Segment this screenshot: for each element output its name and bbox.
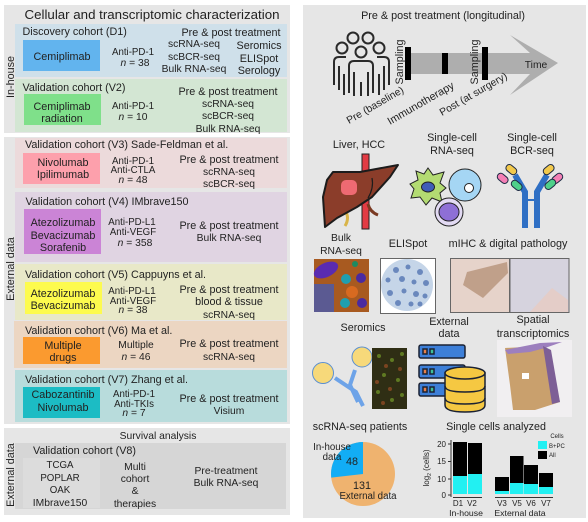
bar labels: V3 bbox=[497, 499, 507, 508]
validation cohort V8 bbox=[33, 445, 259, 510]
validation cohort V3: Ipilimumab bbox=[37, 169, 89, 181]
label: in-house: In-house bbox=[5, 56, 17, 98]
label: external: External bbox=[429, 316, 469, 328]
validation cohort V2: radiation bbox=[41, 113, 83, 125]
validation cohort V3: Validation cohort (V3) Sade-Feldman et al. bbox=[25, 139, 228, 151]
discovery cohort D1: scRNA-seq bbox=[168, 39, 220, 50]
discovery cohort D1: Bulk RNA-seq bbox=[162, 64, 227, 75]
validation cohort V4 bbox=[15, 192, 287, 262]
validation cohort V6: Multiple bbox=[118, 340, 154, 351]
image: mIHC left bbox=[450, 258, 510, 312]
label: data: data bbox=[438, 328, 460, 340]
validation cohort V2: Validation cohort (V2) bbox=[22, 82, 126, 94]
label: post at surgery: Post (at surgery) bbox=[438, 71, 509, 119]
icon: seromics antibody bbox=[312, 347, 372, 406]
validation cohort V2: Pre & post treatment bbox=[178, 86, 278, 98]
validation cohort V3: Anti-CTLA bbox=[111, 165, 156, 176]
validation cohort V6: Pre & post treatment bbox=[179, 338, 279, 350]
icon: patients group bbox=[334, 32, 389, 96]
validation cohort V4: Bevacizumab bbox=[31, 230, 95, 242]
validation cohort V4: Atezolizumab bbox=[31, 217, 95, 229]
validation cohort V7: Nivolumab bbox=[37, 402, 89, 414]
validation cohort V5: Anti-PD-L1 bbox=[108, 286, 156, 297]
image: bulk RNA-seq collage bbox=[311, 258, 369, 312]
bar labels: V2 bbox=[467, 499, 477, 508]
label: transcriptomics: transcriptomics bbox=[497, 328, 570, 340]
validation cohort V3: Anti-PD-1 bbox=[112, 156, 154, 167]
validation cohort V8: IMbrave150 bbox=[33, 498, 87, 509]
discovery cohort D1: Serology bbox=[238, 65, 281, 77]
validation cohort V7: Cabozantinib bbox=[31, 389, 95, 401]
pie chart: patients: 131 bbox=[353, 480, 371, 492]
image: ELISpot well bbox=[380, 258, 436, 314]
bar labels: V6 bbox=[526, 499, 536, 508]
validation cohort V4: Bulk RNA-seq bbox=[197, 233, 262, 244]
validation cohort V7: Pre & post treatment bbox=[179, 393, 279, 405]
marker: immunotherapy bbox=[442, 53, 448, 74]
validation cohort V2: Bulk RNA-seq bbox=[196, 124, 261, 135]
title: Cellular and transcriptomic characterization bbox=[25, 7, 279, 22]
validation cohort V5 bbox=[15, 264, 287, 321]
validation cohort V3: scRNA-seq bbox=[203, 167, 255, 178]
legend: All bbox=[549, 453, 556, 459]
panel: methods and sampling bbox=[303, 5, 586, 518]
validation cohort V7: Visium bbox=[214, 406, 244, 417]
validation cohort V4: Pre & post treatment bbox=[179, 220, 279, 232]
validation cohort V6: drugs bbox=[49, 352, 77, 364]
discovery cohort D1: ELISpot bbox=[240, 53, 278, 65]
validation cohort V7: Anti-TKIs bbox=[114, 399, 154, 410]
validation cohort V5: blood & tissue bbox=[195, 296, 263, 308]
validation cohort V2: Cemiplimab bbox=[34, 101, 90, 113]
validation cohort V6 bbox=[14, 321, 287, 368]
discovery cohort D1: scBCR-seq bbox=[168, 52, 220, 63]
validation cohort V3 bbox=[15, 138, 287, 190]
label: ELISpot: ELISpot bbox=[389, 238, 427, 250]
label: RNA-seq: RNA-seq bbox=[430, 145, 474, 157]
group labels bbox=[449, 508, 546, 518]
validation cohort V4: Validation cohort (V4) IMbrave150 bbox=[26, 196, 189, 208]
icon: liver with tumour bbox=[323, 154, 398, 229]
bar labels: V7 bbox=[541, 499, 551, 508]
bar labels: V5 bbox=[512, 499, 522, 508]
label: liver: Liver, HCC bbox=[333, 139, 385, 151]
validation cohort V5: Pre & post treatment bbox=[179, 284, 279, 296]
label: single-cell RNA-seq: Single-cell bbox=[427, 132, 477, 144]
validation cohort V8: therapies bbox=[114, 499, 156, 510]
discovery cohort D1: Discovery cohort (D1) bbox=[22, 26, 127, 38]
axis tick labels: 0 bbox=[442, 491, 447, 500]
validation cohort V7: Anti-PD-1 bbox=[113, 389, 155, 400]
marker: post sampling bbox=[482, 47, 488, 80]
validation cohort V5: Atezolizumab bbox=[31, 288, 95, 300]
validation cohort V8: Bulk RNA-seq bbox=[194, 478, 259, 489]
pie chart: patients: data bbox=[323, 452, 342, 463]
icon: servers and database bbox=[419, 345, 485, 412]
validation cohort V7: Validation cohort (V7) Zhang et al. bbox=[25, 374, 188, 386]
validation cohort V6: scRNA-seq bbox=[203, 352, 255, 363]
validation cohort V3: scBCR-seq bbox=[203, 179, 255, 190]
validation cohort V4: Anti-VEGF bbox=[110, 227, 156, 238]
validation cohort V3: n = 48 bbox=[119, 175, 148, 186]
validation cohort V2: Anti-PD-1 bbox=[112, 101, 154, 112]
y axis bbox=[448, 440, 553, 498]
validation cohort V5: scRNA-seq bbox=[203, 310, 255, 321]
label: BCR-seq: BCR-seq bbox=[510, 145, 554, 157]
validation cohort V8: Multi bbox=[124, 462, 146, 473]
bars bbox=[453, 442, 553, 494]
axis tick labels: 20 bbox=[437, 440, 447, 449]
label: external data: External data bbox=[5, 237, 17, 301]
y axis title: 2 bbox=[427, 473, 433, 476]
validation cohort V5: Anti-VEGF bbox=[110, 296, 156, 307]
validation cohort V4: n = 358 bbox=[118, 238, 153, 249]
label: RNA-seq bulk: RNA-seq bbox=[320, 246, 362, 257]
panel: external data cohorts bbox=[4, 137, 290, 424]
label: bulk: Bulk bbox=[331, 233, 352, 244]
y axis title: log bbox=[422, 476, 431, 487]
group labels: In-house bbox=[449, 508, 483, 518]
validation cohort V8: Pre-treatment bbox=[195, 466, 258, 477]
panel: survival analysis bbox=[4, 428, 290, 515]
icon: cells bbox=[410, 168, 481, 226]
discovery cohort D1: Cemiplimab bbox=[34, 51, 90, 63]
image: protein array bbox=[372, 348, 407, 409]
validation cohort V8: POPLAR bbox=[40, 473, 80, 484]
arrow: time bbox=[410, 35, 558, 95]
validation cohort V3: Pre & post treatment bbox=[179, 154, 279, 166]
validation cohort V2: scRNA-seq bbox=[202, 99, 254, 110]
icon: antibody bbox=[496, 163, 564, 228]
label: sampling post: Sampling bbox=[469, 39, 481, 85]
label: immunotherapy: Immunotherapy bbox=[386, 79, 457, 128]
label: mIHC and digital pathology: mIHC & digital pathology bbox=[449, 238, 568, 250]
marker: pre sampling bbox=[405, 47, 411, 80]
axis tick labels bbox=[437, 440, 447, 500]
discovery cohort D1: Seromics bbox=[236, 40, 282, 52]
pie chart: patients: 48 bbox=[346, 456, 358, 468]
axis tick labels: 10 bbox=[437, 475, 447, 484]
validation cohort V8: OAK bbox=[50, 485, 71, 496]
legend: B+PC bbox=[549, 444, 566, 450]
validation cohort V6: n = 46 bbox=[122, 352, 151, 363]
validation cohort V6: Validation cohort (V6) Ma et al. bbox=[25, 325, 172, 337]
validation cohort V4: Sorafenib bbox=[40, 242, 86, 254]
bar labels: D1 bbox=[453, 499, 464, 508]
label: seromics: Seromics bbox=[340, 322, 386, 334]
validation cohort V7 bbox=[15, 370, 287, 422]
heading: survival analysis: Survival analysis bbox=[120, 431, 196, 442]
label: single-cell BCR-seq: Single-cell bbox=[507, 132, 557, 144]
validation cohort V5: n = 38 bbox=[119, 305, 148, 316]
group labels: External data bbox=[494, 508, 546, 518]
discovery cohort D1: Anti-PD-1 bbox=[112, 47, 154, 58]
pie chart: patients: In-house bbox=[313, 442, 351, 453]
label: external data survival: External data bbox=[5, 443, 17, 507]
discovery cohort D1: n = 38 bbox=[121, 58, 150, 69]
heading: single cells analyzed: Single cells analyzed bbox=[446, 421, 546, 433]
pie chart: patients bbox=[313, 442, 397, 506]
validation cohort V2: n = 10 bbox=[119, 112, 148, 123]
heading: scRNA-seq patients: scRNA-seq patients bbox=[313, 421, 407, 433]
validation cohort V2 bbox=[15, 79, 287, 135]
y axis title: (cells) bbox=[422, 449, 431, 473]
image: spatial tissue section bbox=[497, 340, 572, 417]
image: mIHC right bbox=[510, 258, 569, 312]
validation cohort V8: TCGA bbox=[47, 460, 74, 471]
heading: longitudinal: Pre & post treatment (longitudinal) bbox=[361, 10, 525, 22]
validation cohort V8: Validation cohort (V8) bbox=[33, 445, 136, 457]
validation cohort V6: Multiple bbox=[44, 340, 82, 352]
validation cohort V3: Nivolumab bbox=[37, 157, 89, 169]
validation cohort V5: Bevacizumab bbox=[31, 300, 95, 312]
validation cohort V4: Anti-PD-L1 bbox=[108, 217, 156, 228]
validation cohort V8: cohort bbox=[121, 474, 149, 485]
axis tick labels: 15 bbox=[437, 457, 447, 466]
panel: in-house cohorts bbox=[4, 5, 290, 135]
validation cohort V5: Validation cohort (V5) Cappuyns et al. bbox=[25, 269, 206, 281]
discovery cohort D1 bbox=[15, 24, 287, 77]
validation cohort V7: n = 7 bbox=[122, 408, 146, 419]
legend: Cells bbox=[550, 434, 564, 440]
bar labels bbox=[453, 499, 551, 508]
bar chart: single cells bbox=[422, 434, 566, 518]
label: time: Time bbox=[525, 60, 548, 71]
pie chart: patients: External data bbox=[339, 491, 397, 502]
label: pre baseline: Pre (baseline) bbox=[345, 85, 406, 127]
discovery cohort D1: Pre & post treatment bbox=[181, 27, 281, 39]
label: sampling pre: Sampling bbox=[394, 39, 406, 85]
validation cohort V8: & bbox=[132, 486, 139, 497]
label: spatial: Spatial bbox=[516, 314, 550, 326]
legend bbox=[538, 434, 566, 459]
validation cohort V2: scBCR-seq bbox=[202, 111, 254, 122]
